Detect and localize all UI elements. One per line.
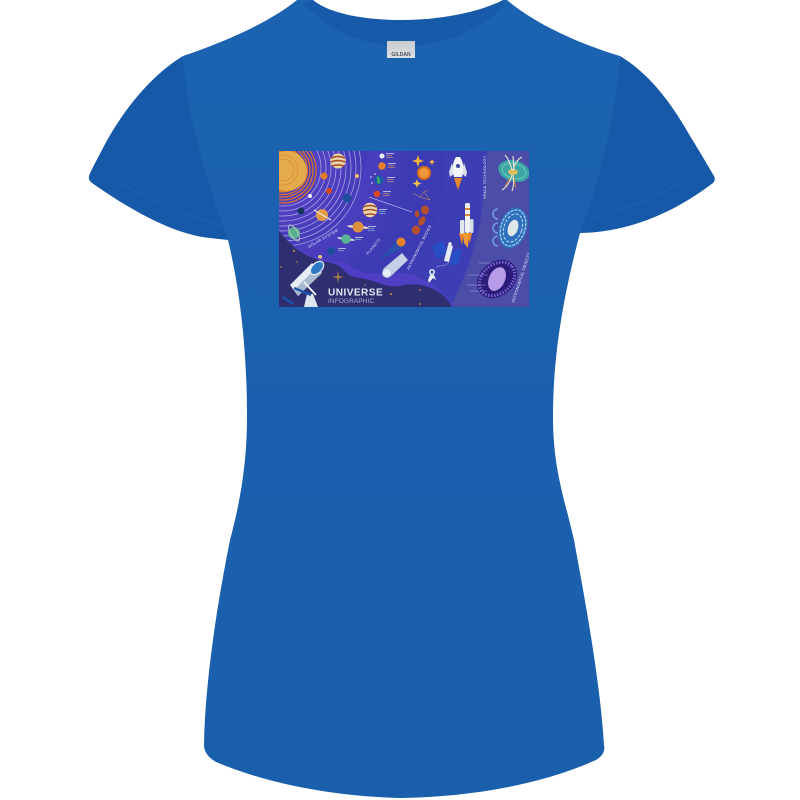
neck label: Gildan [387,41,415,58]
section label: astronomical bodies: ASTRONOMICAL BODIES [406,224,432,270]
satellite [432,241,461,266]
sleeve: left [89,56,228,240]
title: Universe Infographic [328,288,382,303]
shirt body [183,0,620,798]
orbit rings [279,151,362,246]
sun [279,151,317,204]
background: solar system zone [326,151,368,232]
background: planets zone [291,151,385,260]
sleeve: right [572,56,715,240]
comet: white [382,253,408,278]
constellation [413,190,430,200]
section label: planets: PLANETS [366,238,382,256]
astronaut [428,262,449,283]
inner back neck [304,0,505,46]
navy hills with violet wave [279,231,455,307]
solar system planets [286,154,359,243]
ring diagrams [493,209,498,246]
title: Universe Infographic: UNIVERSE [328,288,383,298]
comet: orange [380,238,406,260]
stars and star [412,155,435,188]
background: space technology zone [404,151,487,304]
telescope [283,259,326,307]
printed infographic [279,151,529,307]
elliptical galaxy [467,260,517,298]
section label: solar system: SOLAR SYSTEM [308,228,339,249]
spiral galaxy with rings [498,208,528,248]
asteroids [412,206,429,234]
rocket: multistage [459,203,474,248]
background: astronomical bodies zone [279,151,443,300]
sleeve hem: right [590,168,705,220]
section label: astronomical objects: ASTRONOMICAL OBJECTS [511,252,531,303]
neck label: Gildan: GILDAN [391,52,411,58]
planet captions [338,153,396,251]
supernova [498,154,529,192]
orbit pointer line [369,197,412,212]
t-shirt [89,0,715,798]
section label: space technology: SPACE TECHNOLOGY [483,155,487,199]
background: astronomical objects zone [451,151,529,307]
neckline opening [313,0,503,20]
background stars [280,250,421,305]
title: Universe Infographic: INFOGRAPHIC [328,298,374,305]
sleeve hem: left [96,170,222,226]
collar seam [280,13,524,66]
planets column [318,154,386,259]
rocket: shuttle [449,153,467,190]
